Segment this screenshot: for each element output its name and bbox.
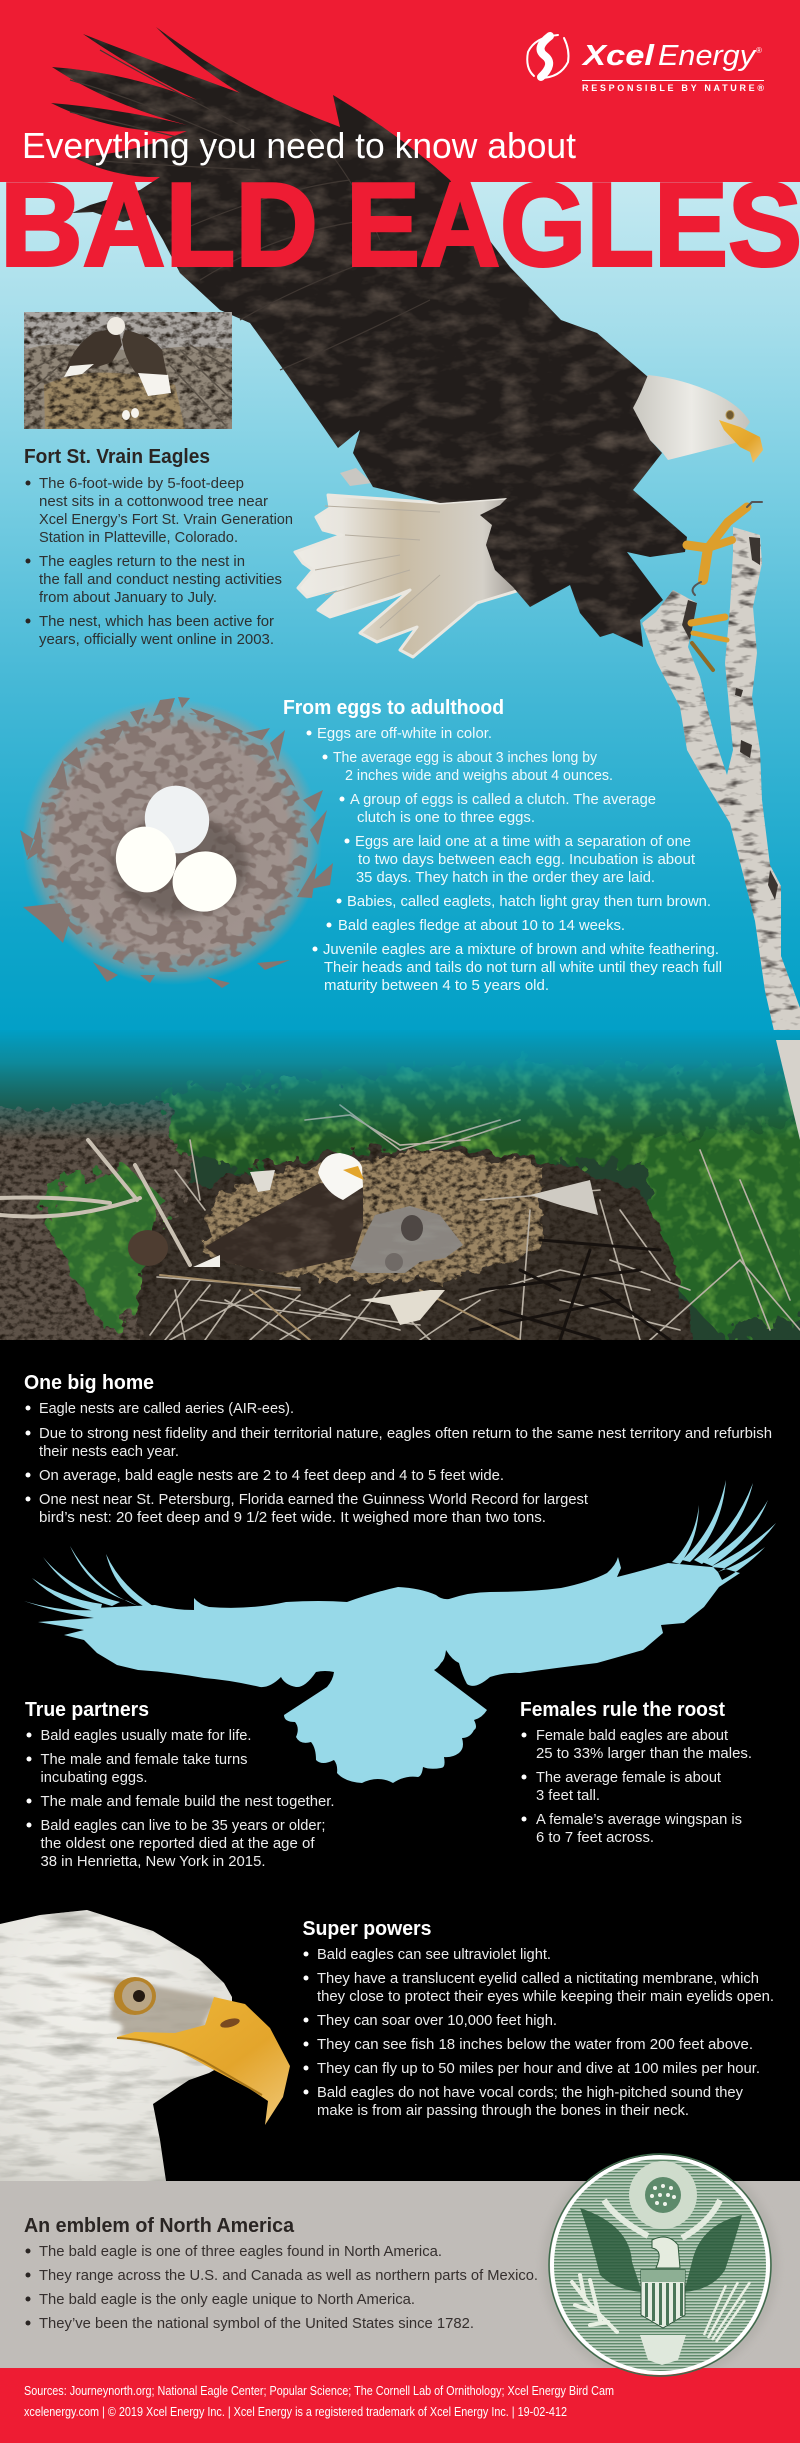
- footer text: Sources: Journeynorth.org; National Eagle Center; Popular Science; The Cornell Lab of Ornithology; Xcel Energy Bird Cam: [24, 2383, 614, 2398]
- eye: [726, 410, 734, 420]
- panel: red footer band: [0, 2368, 800, 2443]
- text block: Females rule the roost: 6 to 7 feet across.: [536, 1829, 654, 1846]
- text block: Fort St. Vrain Eagles: The eagles return to the nest in: [39, 553, 245, 570]
- nest twig flecks: [36, 712, 308, 972]
- text block: True partners: 38 in Henrietta, New York in 2015.: [40, 1853, 266, 1870]
- title line: Everything you need to know about: [22, 125, 576, 166]
- text block: An emblem of North America: The bald eagle is one of three eagles found in North America.: [39, 2243, 442, 2260]
- icon: swirl: [527, 35, 568, 78]
- illustration: nest with three eggs: [20, 697, 333, 988]
- text block: An emblem of North America: [24, 2215, 538, 2332]
- panel: gray emblem band: [0, 2181, 800, 2368]
- text block: From eggs to adulthood: Eggs are off-white in color.: [317, 725, 492, 742]
- text block: Super powers: Super powers: [302, 1918, 432, 1940]
- dark twigs: [470, 1240, 670, 1340]
- silhouette: soaring eagle: [24, 1480, 776, 1783]
- eagle head: [652, 2237, 680, 2268]
- egg top: [136, 777, 218, 862]
- text block: An emblem of North America: They’ve been the national symbol of the United States since 1782.: [39, 2315, 474, 2332]
- panel: red header band: [0, 0, 800, 182]
- pale twigs: [150, 1105, 800, 1340]
- text block: An emblem of North America: An emblem of North America: [24, 2215, 295, 2237]
- text block: From eggs to adulthood: Babies, called eaglets, hatch light gray then turn brown.: [347, 893, 711, 910]
- text block: Females rule the roost: Female bald eagles are about: [536, 1727, 729, 1744]
- text block: Super powers: [302, 1918, 774, 2119]
- text block: From eggs to adulthood: A group of eggs is called a clutch. The average: [350, 791, 656, 808]
- text block: Females rule the roost: A female’s average wingspan is: [536, 1811, 742, 1828]
- text block: Super powers: make is from air passing through the bones in their neck.: [317, 2102, 689, 2119]
- text block: True partners: The male and female take turns: [40, 1751, 248, 1768]
- text block: Females rule the roost: Females rule the roost: [520, 1699, 725, 1721]
- text block: From eggs to adulthood: Juvenile eagles are a mixture of brown and white feathering.: [323, 941, 719, 958]
- text block: An emblem of North America: They range across the U.S. and Canada as well as northern parts of Mexico.: [39, 2267, 538, 2284]
- nostril: [219, 2017, 241, 2029]
- seal disc: [552, 2157, 768, 2373]
- brown pod: [128, 1230, 168, 1266]
- photo: bald eagle head close-up: [0, 1910, 290, 2181]
- text block: Fort St. Vrain Eagles: nest sits in a cottonwood tree near: [39, 493, 268, 510]
- small white under-feather: [340, 468, 372, 486]
- yellow beak: [719, 420, 763, 463]
- text block: Females rule the roost: [520, 1699, 752, 1846]
- eye: [114, 1977, 156, 2015]
- photo: eagle landing on birch branch: [51, 27, 800, 1140]
- text block: Super powers: Bald eagles can see ultraviolet light.: [317, 1946, 551, 1963]
- text block: True partners: Bald eagles usually mate for life.: [40, 1727, 252, 1744]
- text block: Super powers: They can fly up to 50 miles per hour and dive at 100 miles per hour.: [317, 2060, 760, 2077]
- text block: True partners: the oldest one reported died at the age of: [40, 1835, 315, 1852]
- text block: Fort St. Vrain Eagles: the fall and conduct nesting activities: [39, 571, 282, 588]
- gray brow patch: [60, 1975, 218, 2045]
- shield: [641, 2270, 685, 2328]
- laurel branch: [572, 2275, 617, 2332]
- text block: From eggs to adulthood: From eggs to adulthood: [283, 697, 504, 719]
- panel: sky gradient background: [0, 182, 800, 1052]
- text block: Super powers: They have a translucent eyelid called a nictitating membrane, which: [317, 1970, 759, 1987]
- light branches: [0, 1140, 190, 1265]
- text block: Fort St. Vrain Eagles: Station in Platteville, Colorado.: [39, 529, 238, 546]
- talons: [687, 502, 762, 670]
- text block: One big home: Due to strong nest fidelity and their territorial nature, eagles often return to the same nest territory and refurbish: [39, 1425, 772, 1442]
- egg right: [167, 846, 242, 917]
- straw lining: [205, 1150, 545, 1280]
- text block: True partners: incubating eggs.: [40, 1769, 148, 1786]
- white head: [633, 375, 750, 460]
- tail: [640, 2335, 686, 2365]
- footer text: xcelenergy.com | © 2019 Xcel Energy Inc. | Xcel Energy is a registered trademark of Xcel Energy Inc. | 19-02-412: [24, 2404, 567, 2419]
- title: BALD EAGLES: [0, 158, 800, 292]
- text block: From eggs to adulthood: maturity between 4 to 5 years old.: [324, 977, 549, 994]
- eagle white head: [318, 1153, 363, 1200]
- text block: Super powers: they close to protect their eyes while keeping their main eyelids open.: [317, 1988, 774, 2005]
- text block: Females rule the roost: 3 feet tall.: [536, 1787, 600, 1804]
- text block: Females rule the roost: 25 to 33% larger than the males.: [536, 1745, 752, 1762]
- text block: Fort St. Vrain Eagles: The 6-foot-wide by 5-foot-deep: [39, 475, 244, 492]
- title: BALD EAGLES: BALD: [0, 158, 318, 292]
- text block: One big home: Eagle nests are called aeries (AIR-ees).: [39, 1400, 294, 1417]
- text block: From eggs to adulthood: Bald eagles fledge at about 10 to 14 weeks.: [338, 917, 625, 934]
- text block: From eggs to adulthood: 2 inches wide and weighs about 4 ounces.: [345, 767, 613, 784]
- birch branch: [642, 527, 800, 1140]
- mouth line: [117, 2038, 262, 2095]
- eagle tail: [193, 1255, 220, 1267]
- text block: From eggs to adulthood: The average egg is about 3 inches long by: [333, 749, 597, 766]
- egg left: [110, 821, 182, 898]
- panel: black background: [0, 1340, 800, 2182]
- text block: From eggs to adulthood: 35 days. They hatch in the order they are laid.: [356, 869, 655, 886]
- tail feathers: [295, 495, 530, 657]
- text block: One big home: One big home: [24, 1372, 154, 1394]
- birch trunk overlap: [776, 1040, 800, 1140]
- text block: Super powers: They can soar over 10,000 feet high.: [317, 2012, 557, 2029]
- text block: From eggs to adulthood: [283, 697, 722, 994]
- text block: Fort St. Vrain Eagles: from about January to July.: [39, 589, 217, 606]
- text block: Fort St. Vrain Eagles: Fort St. Vrain Eagles: [24, 446, 210, 468]
- logo: Xcel Energy: Xcel: [581, 40, 655, 72]
- text block: One big home: [24, 1372, 772, 1526]
- wings: [580, 2208, 642, 2292]
- text block: One big home: their nests each year.: [39, 1443, 179, 1460]
- wing and dark body: [51, 27, 687, 647]
- halo: [544, 2181, 776, 2368]
- text block: Super powers: They can see fish 18 inches below the water from 200 feet above.: [317, 2036, 753, 2053]
- photo: eagle and eaglets on large nest: [0, 1030, 800, 1360]
- foliage top: [160, 1060, 800, 1185]
- text block: From eggs to adulthood: to two days between each egg. Incubation is about: [358, 851, 696, 868]
- background brush: [0, 1100, 200, 1360]
- text block: Fort St. Vrain Eagles: Xcel Energy’s Fort St. Vrain Generation: [39, 511, 293, 528]
- text block: True partners: [25, 1699, 334, 1870]
- twigs: [0, 1105, 800, 1340]
- text block: One big home: bird’s nest: 20 feet deep and 9 1/2 feet wide. It weighed more than two tons.: [39, 1509, 546, 1526]
- nest soft base: [22, 699, 322, 985]
- scrolls: [604, 2200, 720, 2238]
- foliage left sprigs: [45, 1165, 165, 1335]
- icon: Great Seal engraving: [542, 2147, 778, 2383]
- glory of stars: [629, 2161, 697, 2229]
- text block: True partners: The male and female build the nest together.: [40, 1793, 334, 1810]
- photo: eagles on Fort St. Vrain nest: [24, 312, 232, 429]
- teal fade at top of photo: [0, 1030, 800, 1140]
- beak: [117, 1997, 290, 2125]
- twig nest mass: [135, 1148, 695, 1360]
- text block: Females rule the roost: The average female is about: [536, 1769, 722, 1786]
- text block: From eggs to adulthood: Their heads and tails do not turn all white until they reach full: [324, 959, 722, 976]
- logo: Xcel Energy: ®: [756, 46, 762, 55]
- adult eagle body: [205, 1183, 363, 1273]
- text block: An emblem of North America: The bald eagle is the only eagle unique to North America.: [39, 2291, 415, 2308]
- egg shadows: [112, 816, 248, 916]
- logo: Xcel Energy: Energy: [658, 40, 757, 72]
- gray eaglets: [350, 1206, 463, 1273]
- text block: True partners: True partners: [25, 1699, 149, 1721]
- text block: Fort St. Vrain Eagles: The nest, which has been active for: [39, 613, 274, 630]
- text block: One big home: One nest near St. Petersburg, Florida earned the Guinness World Record for largest: [39, 1491, 589, 1508]
- white debris: [360, 1290, 445, 1325]
- text block: Super powers: Bald eagles do not have vocal cords; the high-pitched sound they: [317, 2084, 743, 2101]
- text block: Fort St. Vrain Eagles: years, officially went online in 2003.: [39, 631, 274, 648]
- text block: True partners: Bald eagles can live to be 35 years or older;: [40, 1817, 326, 1834]
- footer text: [24, 2383, 614, 2419]
- text block: Fort St. Vrain Eagles: [24, 446, 293, 648]
- logo: Xcel Energy: RESPONSIBLE BY NATURE®: [582, 83, 764, 93]
- text block: One big home: On average, bald eagle nests are 2 to 4 feet deep and 4 to 5 feet wide.: [39, 1467, 504, 1484]
- eagle beak: [343, 1166, 364, 1180]
- logo: Xcel Energy: [527, 35, 764, 93]
- arrows: [704, 2282, 750, 2342]
- white feathered head: [0, 1910, 232, 2181]
- text block: From eggs to adulthood: clutch is one to three eggs.: [357, 809, 535, 826]
- outer twig spikes: [20, 697, 333, 988]
- foliage right: [640, 1120, 800, 1335]
- text block: From eggs to adulthood: Eggs are laid one at a time with a separation of one: [355, 833, 691, 850]
